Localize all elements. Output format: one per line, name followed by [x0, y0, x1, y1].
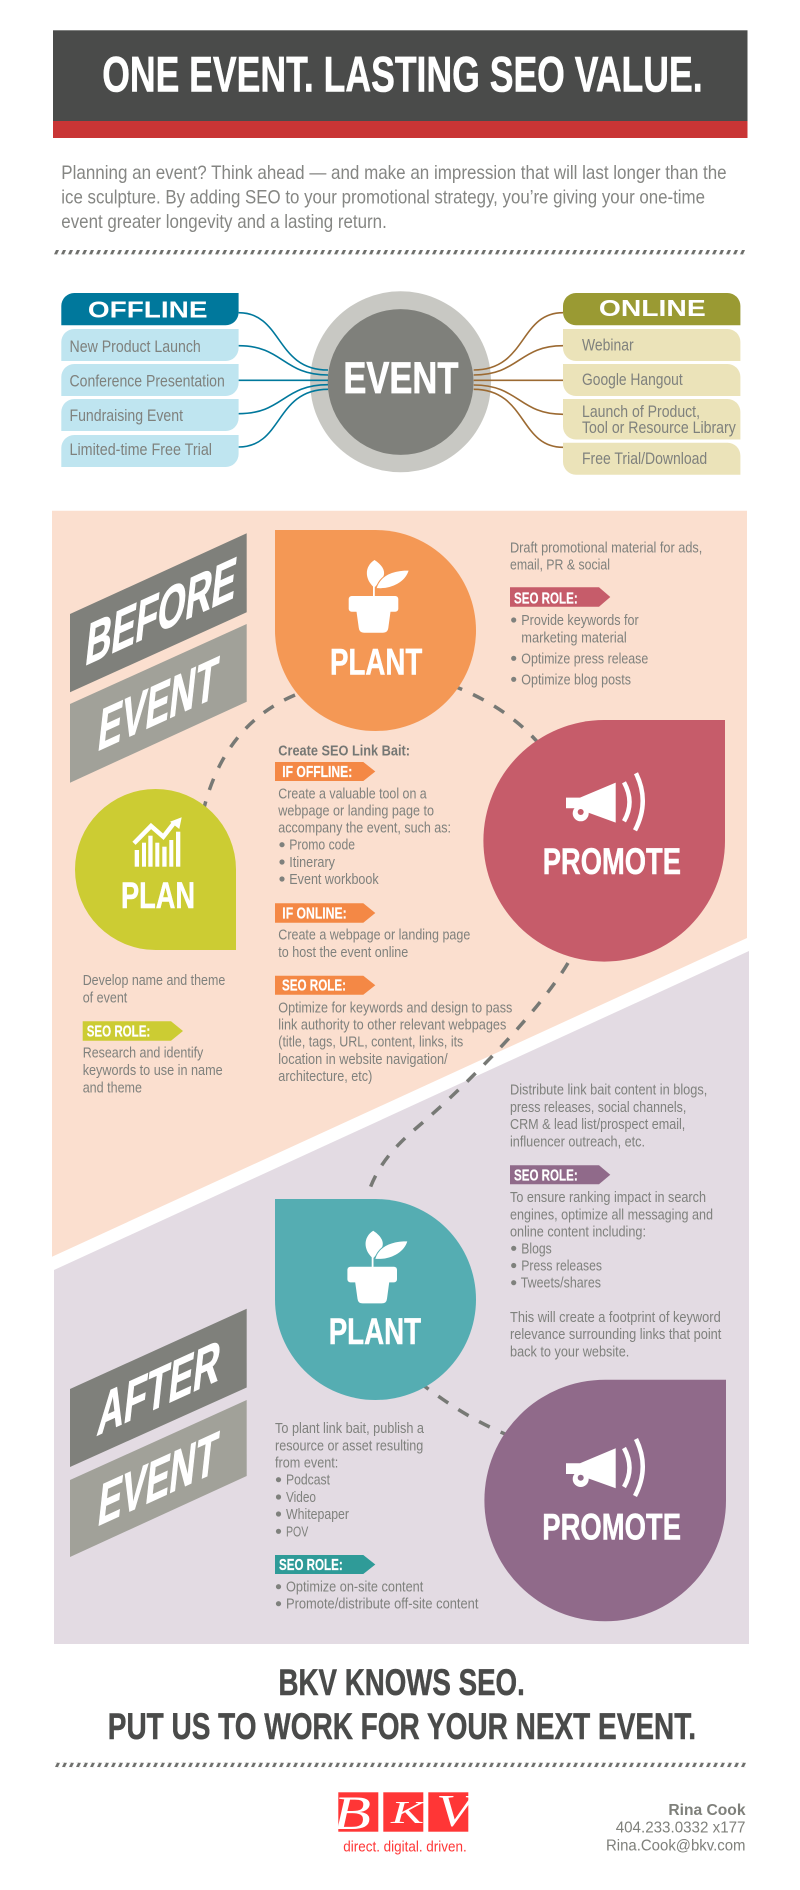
text block: plant after: Promote/distribute off-site content — [286, 1596, 479, 1613]
online item: launch of product — [563, 399, 740, 440]
text block: promote before: marketing material — [521, 629, 627, 646]
text block: plant after: resource or asset resulting — [275, 1437, 423, 1454]
logo: BKV: B — [333, 1787, 371, 1840]
plant badge: after — [275, 1199, 476, 1400]
panel: before event background — [52, 511, 747, 1257]
panel: after event background — [54, 951, 749, 1644]
icon: rising chart — [134, 817, 182, 867]
closing call to action: BKV KNOWS SEO. — [278, 1662, 525, 1703]
banner: before event — [70, 533, 247, 783]
connectors: online — [474, 313, 563, 447]
promote badge: after: PROMOTE — [542, 1506, 681, 1547]
text block: plant after: To plant link bait, publish a — [275, 1420, 424, 1437]
text block: plant after: Optimize on-site content — [286, 1579, 424, 1596]
text block: create SEO link bait: Optimize for keywords and design to pass — [278, 999, 513, 1016]
text block: promote after: Blogs — [521, 1240, 552, 1257]
offline heading: OFFLINE — [88, 297, 208, 323]
text block: promote after — [510, 1082, 722, 1360]
tag: seo role: SEO ROLE: — [279, 1557, 343, 1574]
panel: online list — [563, 293, 740, 475]
offline item: conference presentation: Conference Presentation — [70, 372, 225, 390]
text block: create SEO link bait: (title, tags, URL, content, links, its — [278, 1034, 464, 1050]
text block: create SEO link bait: Create a webpage or landing page — [278, 927, 470, 944]
text block: create SEO link bait: link authority to other relevant webpages — [278, 1016, 507, 1034]
text block: create SEO link bait — [275, 743, 513, 1085]
plan badge — [75, 789, 236, 950]
text block: create SEO link bait: Promo code — [289, 837, 355, 854]
plant badge: before: PLANT — [330, 641, 423, 682]
intro text: ice sculpture. By adding SEO to your promotional strategy, you’re giving your one-time — [61, 186, 705, 208]
text block: create SEO link bait: Event workbook — [289, 871, 379, 888]
text block: promote after: This will create a footprint of keyword — [510, 1309, 721, 1326]
offline item: limited-time free trial: Limited-time Free Trial — [70, 440, 212, 459]
text block: promote before: Provide keywords for — [521, 612, 639, 629]
offline item: conference presentation — [61, 364, 239, 396]
offline item: new product launch: New Product Launch — [70, 337, 201, 356]
event strip — [70, 1400, 247, 1557]
dashed path: plan to plant — [204, 695, 295, 808]
text block: create SEO link bait: accompany the event, such as: — [278, 819, 451, 836]
banner: after event — [70, 1309, 247, 1557]
text block: promote after: Press releases — [521, 1258, 602, 1274]
after strip: AFTER — [95, 1327, 224, 1449]
text block: promote after: online content including: — [510, 1223, 646, 1240]
event circle: EVENT — [343, 354, 458, 403]
tag: if offline: IF OFFLINE: — [282, 764, 352, 781]
text block: create SEO link bait: Create SEO Link Bait: — [278, 743, 410, 760]
promote badge: after — [484, 1380, 726, 1621]
logo: BKV: V — [436, 1785, 478, 1836]
text block: plan — [83, 972, 225, 1096]
tag: if online: IF ONLINE: — [282, 905, 347, 922]
tag: seo role: SEO ROLE: — [87, 1024, 150, 1041]
online item: free trial/download: Free Trial/Download — [582, 449, 707, 468]
text block: promote after: press releases, social channels, — [510, 1099, 686, 1116]
text block: plan: of event — [83, 989, 128, 1006]
dashed path: plant to promote — [451, 685, 540, 745]
text block: promote after: influencer outreach, etc. — [510, 1133, 645, 1150]
text block: plan: Research and identify — [83, 1045, 204, 1062]
promote badge: before: PROMOTE — [543, 841, 681, 882]
contact details: Rina Cook — [668, 1802, 746, 1819]
text block: promote after: Tweets/shares — [521, 1275, 601, 1292]
text block: promote before: Optimize blog posts — [521, 671, 631, 688]
contact details: Rina.Cook@bkv.com — [606, 1838, 746, 1855]
offline item: limited-time free trial — [61, 435, 239, 467]
plan badge: PLAN — [121, 875, 195, 916]
text block: create SEO link bait: architecture, etc) — [278, 1068, 372, 1085]
offline item: new product launch — [61, 329, 239, 361]
plant badge: before — [275, 530, 476, 731]
text block: promote before: email, PR & social — [510, 556, 610, 573]
online heading: ONLINE — [599, 295, 706, 321]
online item: webinar: Webinar — [582, 336, 634, 355]
tag: seo role: SEO ROLE: — [514, 1167, 578, 1184]
text block: plant after: from event: — [275, 1454, 338, 1471]
text block: plant after: Whitepaper — [286, 1506, 349, 1523]
text block: promote after: To ensure ranking impact in search — [510, 1189, 706, 1206]
event circle — [310, 291, 491, 472]
contact details: 404.233.0332 x177 — [616, 1820, 746, 1837]
text block: plan: keywords to use in name — [83, 1062, 223, 1079]
logo: BKV — [333, 1785, 478, 1856]
online item: google hangout: Google Hangout — [582, 370, 683, 389]
text block: plant after — [275, 1420, 479, 1613]
text block: create SEO link bait: webpage or landing page to — [277, 802, 434, 819]
text block: promote after: CRM & lead list/prospect email, — [510, 1116, 685, 1133]
text block: create SEO link bait: location in website navigation/ — [278, 1051, 448, 1068]
closing call to action — [108, 1662, 696, 1747]
before strip: BEFORE — [83, 544, 240, 679]
panel: offline list — [61, 293, 239, 467]
event strip — [70, 624, 247, 783]
online item: launch of product: Launch of Product, — [582, 402, 700, 421]
logo: BKV: K — [389, 1794, 427, 1830]
icon: potted plant — [347, 1231, 408, 1303]
tag: seo role: SEO ROLE: — [282, 978, 346, 995]
event strip: EVENT — [95, 1419, 221, 1540]
online item: webinar — [563, 329, 740, 361]
intro text: Planning an event? Think ahead — and make an impression that will last longer than the — [61, 162, 727, 184]
header banner — [53, 30, 748, 138]
text block: plan: Develop name and theme — [83, 972, 225, 989]
event strip: EVENT — [95, 644, 221, 765]
text block: plant after: Podcast — [286, 1472, 331, 1489]
text block: plant after: Video — [286, 1489, 316, 1506]
before strip — [70, 533, 247, 692]
promote badge: before — [483, 720, 725, 962]
text block: create SEO link bait: to host the event online — [278, 944, 408, 961]
contact details — [606, 1802, 746, 1855]
connectors: offline — [239, 313, 328, 447]
online heading — [563, 293, 740, 325]
online item: google hangout — [563, 364, 740, 396]
offline item: fundraising event — [61, 399, 239, 431]
text block: promote before — [510, 539, 702, 688]
after strip — [70, 1309, 247, 1467]
intro text — [61, 162, 727, 233]
logo: BKV: direct. digital. driven. — [343, 1840, 467, 1856]
online item: launch of product: Tool or Resource Library — [582, 418, 736, 437]
text block: promote after: back to your website. — [510, 1343, 629, 1360]
plant badge: after: PLANT — [329, 1311, 421, 1352]
text block: promote after: engines, optimize all messaging and — [510, 1206, 713, 1223]
text block: create SEO link bait: Itinerary — [289, 854, 335, 871]
icon: megaphone — [566, 1439, 643, 1496]
dashed path: after plant to promote — [419, 1382, 510, 1436]
online item: free trial/download — [563, 443, 740, 475]
dashed path: promote to after plant — [369, 963, 568, 1191]
text block: plant after: POV — [286, 1523, 309, 1540]
icon: potted plant — [349, 560, 409, 633]
text block: promote after: Distribute link bait content in blogs, — [510, 1082, 707, 1099]
text block: promote before: Draft promotional material for ads, — [510, 539, 702, 556]
text block: plan: and theme — [83, 1079, 142, 1096]
text block: promote before: Optimize press release — [521, 650, 648, 667]
tag: seo role: SEO ROLE: — [514, 590, 578, 607]
text block: promote after: relevance surrounding links that point — [510, 1326, 722, 1343]
intro text: event greater longevity and a lasting return. — [61, 211, 387, 233]
offline heading — [61, 293, 239, 325]
text block: create SEO link bait: Create a valuable tool on a — [278, 785, 427, 802]
offline item: fundraising event: Fundraising Event — [70, 406, 183, 425]
icon: megaphone — [566, 773, 643, 830]
